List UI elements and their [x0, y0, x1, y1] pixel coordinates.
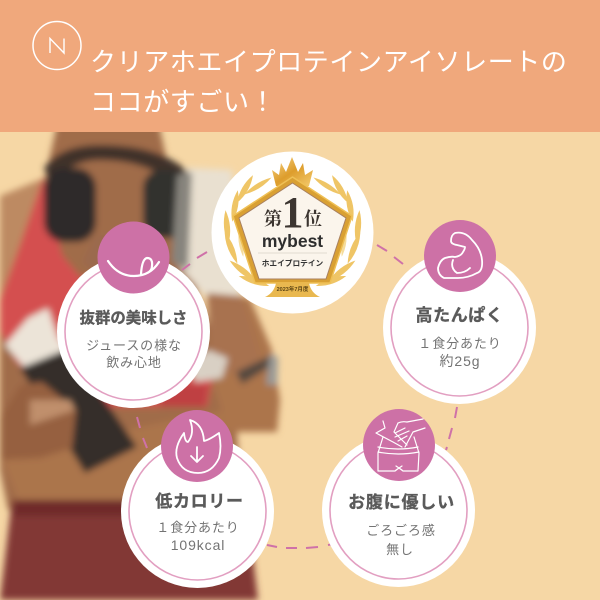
description [86, 338, 182, 370]
title [90, 47, 568, 117]
panel: ranking badge [212, 152, 374, 314]
description [156, 520, 240, 553]
heading: 低カロリー [155, 492, 244, 511]
heading: お腹に優しい [348, 492, 455, 512]
description: 飲み心地 [106, 355, 162, 370]
icon: flame with arrow [161, 410, 233, 482]
panel: gentle on stomach [322, 409, 475, 587]
badge text: 1 [282, 188, 304, 237]
description [366, 523, 436, 557]
description: 109kcal [171, 537, 225, 553]
description: ジュースの様な [86, 338, 182, 353]
description: １食分あたり [418, 336, 502, 351]
title: ココがすごい！ [90, 87, 276, 117]
description: ごろごろ感 [366, 523, 436, 538]
icon: pentagon plaque [233, 177, 352, 283]
badge text: mybest [262, 231, 323, 251]
header band [0, 0, 600, 132]
icon: flexed arm [424, 220, 496, 292]
description: １食分あたり [156, 520, 240, 535]
description [418, 336, 502, 369]
badge text: ホエイプロテイン [262, 259, 324, 268]
skin: neck, shoulders and torso [0, 120, 242, 510]
icon: trophy base [265, 283, 320, 297]
badge text: 2023年7月度 [277, 285, 309, 293]
panel: protein [383, 220, 536, 404]
badge text [258, 188, 327, 293]
icon: tongue smile [98, 222, 170, 294]
blurred photo of athlete [0, 120, 280, 600]
description: 約25g [440, 353, 480, 369]
panel: taste [57, 222, 210, 408]
dashed connectors [137, 245, 457, 548]
badge text: 位 [304, 209, 322, 229]
heading: 高たんぱく [416, 305, 504, 325]
icon: laurel wreath [222, 174, 363, 289]
title: クリアホエイプロテインアイソレートの [90, 47, 568, 77]
icon: hands on belly [363, 409, 435, 481]
description: 無し [386, 542, 414, 557]
heading: 抜群の美味しさ [80, 309, 187, 327]
icon: crown [272, 157, 313, 186]
logo: N in circle [33, 22, 81, 70]
badge text: 第 [264, 209, 282, 229]
panel: low calorie [121, 410, 274, 588]
